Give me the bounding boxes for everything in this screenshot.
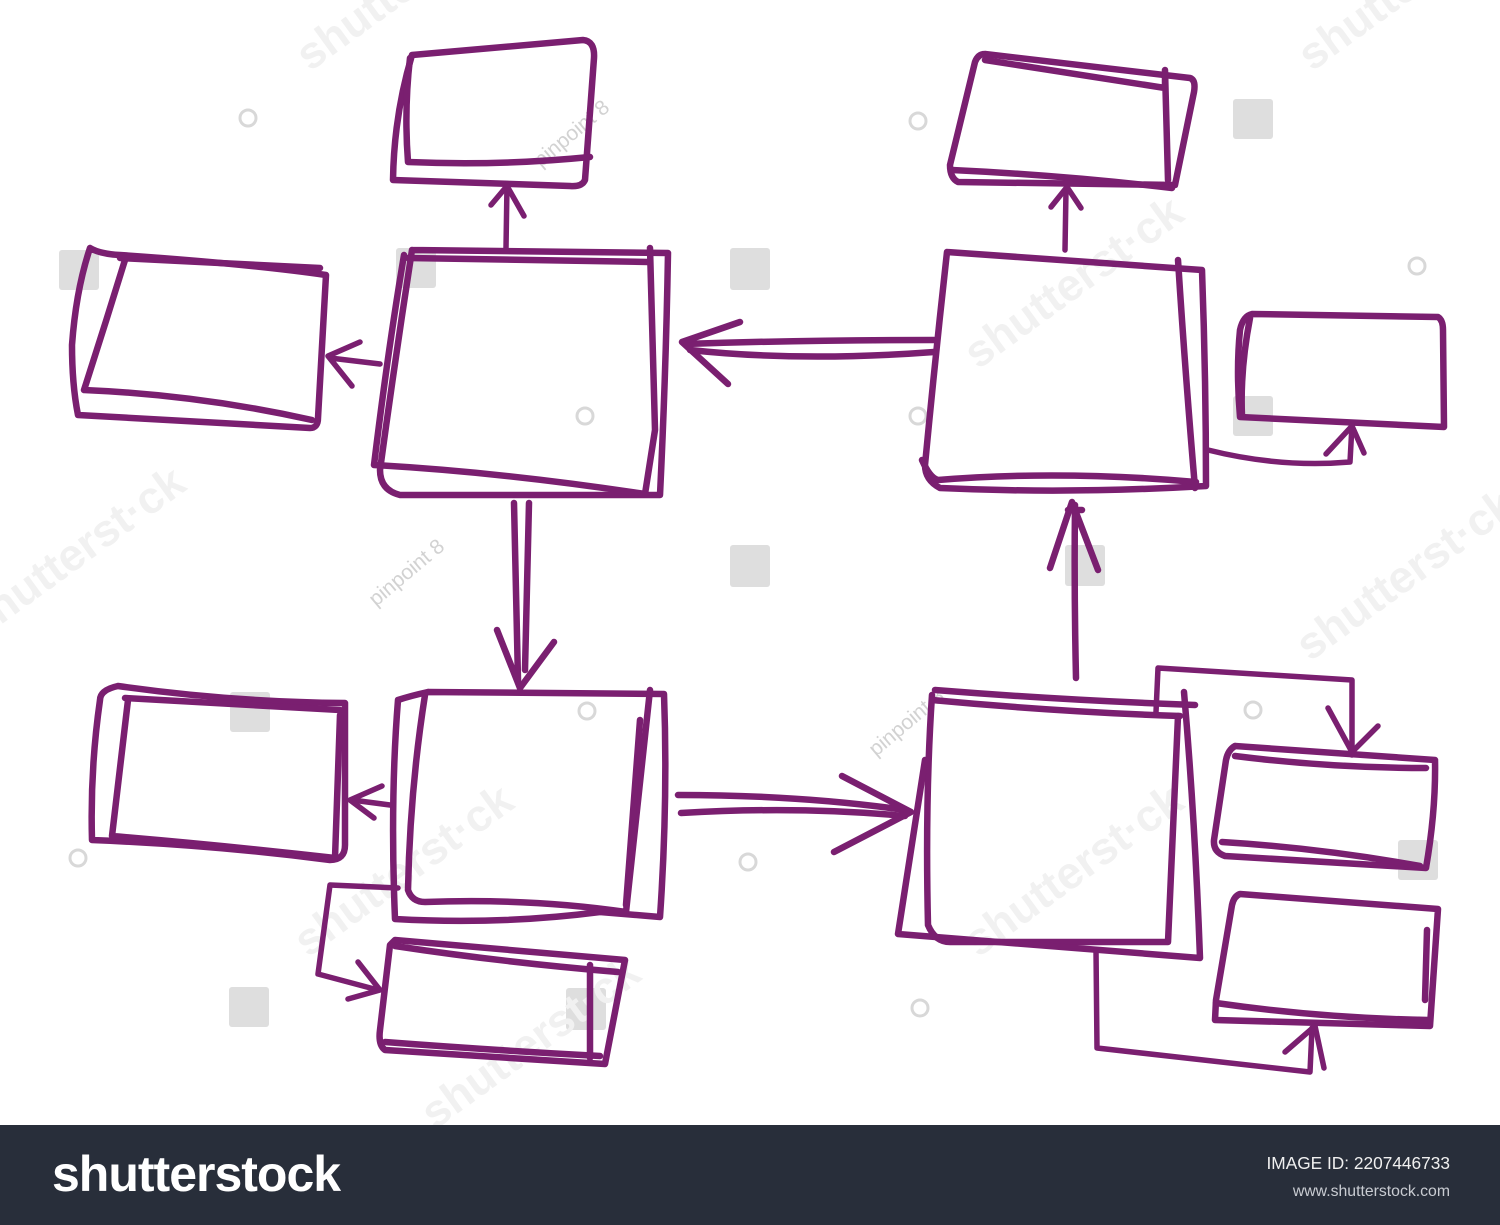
arrow: right hub to far right satellite xyxy=(1208,425,1364,464)
watermarks: pinpoint 8 xyxy=(864,685,949,761)
image id: IMAGE ID: 2207446733 xyxy=(1266,1153,1450,1173)
arrow: left hub to left satellite xyxy=(328,342,380,386)
footer bar xyxy=(0,1125,1500,1225)
arrow: lower hub to lower right hub xyxy=(678,776,911,852)
box: left hub xyxy=(374,248,668,495)
arrow: left hub to top satellite xyxy=(491,185,524,248)
arrow: lower right hub to right lower satellite xyxy=(1096,950,1324,1072)
arrow: lower hub to bottom small box xyxy=(318,885,398,999)
box: right upper satellite xyxy=(1214,746,1435,868)
watermarks: pinpoint 8 xyxy=(529,96,614,172)
box: lower right hub xyxy=(898,690,1200,958)
arrow: lower right hub to right hub xyxy=(1050,502,1098,678)
arrow: lower hub to lower left satellite xyxy=(350,786,390,818)
watermarks: shutterst·ck xyxy=(954,773,1193,966)
box: far right satellite xyxy=(1238,314,1444,427)
box: bottom small xyxy=(380,940,625,1064)
watermarks: shutterst·ck xyxy=(284,773,523,966)
arrow: right hub to left hub xyxy=(682,322,934,384)
arrow: lower right hub to right upper satellite xyxy=(1156,668,1378,755)
arrow: left hub to lower hub xyxy=(497,503,554,688)
watermarks: shutterst·ck xyxy=(954,185,1193,378)
watermarks: pinpoint 8 xyxy=(364,535,449,611)
box: right lower satellite xyxy=(1215,894,1438,1026)
website: www.shutterstock.com xyxy=(1293,1183,1450,1200)
box: top right satellite xyxy=(950,54,1194,188)
arrow: right hub to top right satellite xyxy=(1051,187,1081,250)
box: top left satellite xyxy=(72,248,326,428)
box: right hub xyxy=(922,252,1206,491)
box: lower left hub xyxy=(393,690,665,921)
shutterstock logo: shutterstock xyxy=(52,1146,340,1202)
box: lower left satellite xyxy=(92,686,345,860)
box: top centre satellite xyxy=(393,40,594,186)
